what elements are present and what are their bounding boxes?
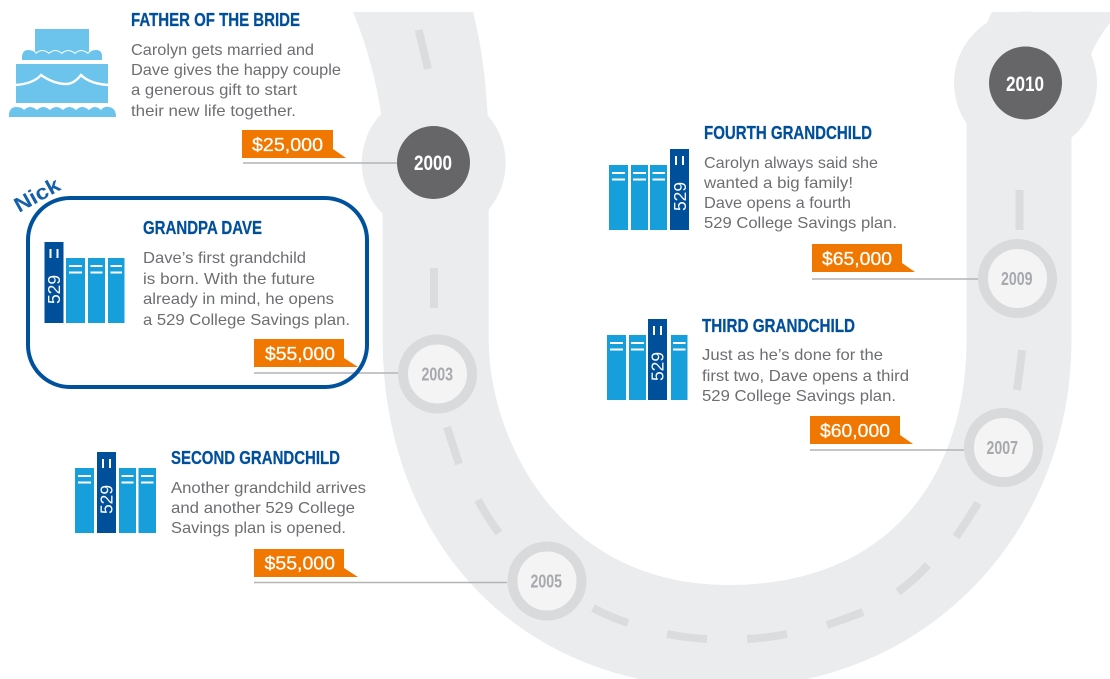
year marker: 2009: 2009 <box>1001 269 1032 289</box>
text block <box>702 347 909 405</box>
icon: 529 books <box>609 149 690 230</box>
amount tag <box>242 130 346 158</box>
text block: and another 529 College <box>171 500 355 517</box>
text block <box>703 155 897 232</box>
icon: 529 books: 529 <box>96 485 116 514</box>
text block <box>171 480 366 537</box>
panel: grandpa dave <box>10 173 367 387</box>
panel: fourth grandchild <box>609 123 915 272</box>
heading: GRANDPA DAVE <box>143 218 262 238</box>
panel: father of the bride <box>9 10 346 158</box>
year marker: 2009 <box>983 244 1052 313</box>
handwritten label: Nick: Nick <box>10 173 65 217</box>
year marker: 2010: 2010 <box>1006 73 1044 96</box>
highlight box <box>28 198 367 387</box>
year marker: 2007: 2007 <box>986 438 1018 458</box>
text block: Dave’s first grandchild <box>143 250 306 267</box>
icon: 529 books <box>75 452 156 533</box>
text block: 529 College Savings plan. <box>702 388 896 405</box>
text block: Dave gives the happy couple <box>131 62 341 79</box>
text block: their new life together. <box>131 103 296 120</box>
panel: third grandchild <box>607 316 913 444</box>
connector lines <box>243 163 978 582</box>
amount tag: $25,000 <box>252 135 323 155</box>
amount tag <box>254 549 358 577</box>
icon: 529 books <box>44 242 124 323</box>
icon: wedding cake <box>9 29 116 117</box>
text block: Dave opens a fourth <box>704 195 851 212</box>
year marker: 2000 <box>397 126 470 199</box>
amount tag: $55,000 <box>264 554 335 574</box>
text block: already in mind, he opens <box>143 291 334 308</box>
year marker: 2003 <box>403 340 472 408</box>
heading: FATHER OF THE BRIDE <box>131 10 300 30</box>
text block: Just as he’s done for the <box>702 347 883 364</box>
amount tag <box>254 339 358 367</box>
text block: Carolyn always said she <box>704 155 878 172</box>
amount tag <box>810 416 913 444</box>
heading: SECOND GRANDCHILD <box>171 448 340 468</box>
year marker: 2005: 2005 <box>530 572 562 592</box>
year marker: 2000: 2000 <box>414 152 452 175</box>
icon: 529 books: 529 <box>44 275 64 304</box>
panel: second grandchild <box>75 448 366 577</box>
icon: 529 books: 529 <box>648 352 668 381</box>
road <box>353 12 1110 679</box>
text block: a 529 College Savings plan. <box>143 312 350 329</box>
heading: FOURTH GRANDCHILD <box>704 123 872 143</box>
amount tag <box>812 244 915 272</box>
icon: 529 books <box>607 319 688 400</box>
text block: a generous gift to start <box>131 82 298 99</box>
year marker: 2007 <box>969 413 1038 482</box>
year marker: 2010 <box>989 46 1062 120</box>
text block: Carolyn gets married and <box>131 42 314 59</box>
text block: Another grandchild arrives <box>171 480 366 497</box>
heading: THIRD GRANDCHILD <box>702 316 855 336</box>
year marker: 2003: 2003 <box>422 364 453 384</box>
text block <box>131 42 341 120</box>
text block: first two, Dave opens a third <box>702 368 909 385</box>
text block: Savings plan is opened. <box>171 520 346 537</box>
text block: is born. With the future <box>143 271 315 288</box>
text block: wanted a big family! <box>703 175 853 192</box>
amount tag: $65,000 <box>822 249 892 269</box>
year marker: 2005 <box>512 546 582 616</box>
amount tag: $55,000 <box>265 344 335 364</box>
amount tag: $60,000 <box>820 421 890 441</box>
text block: 529 College Savings plan. <box>704 215 897 232</box>
icon: 529 books: 529 <box>670 182 690 211</box>
text block <box>143 250 350 329</box>
